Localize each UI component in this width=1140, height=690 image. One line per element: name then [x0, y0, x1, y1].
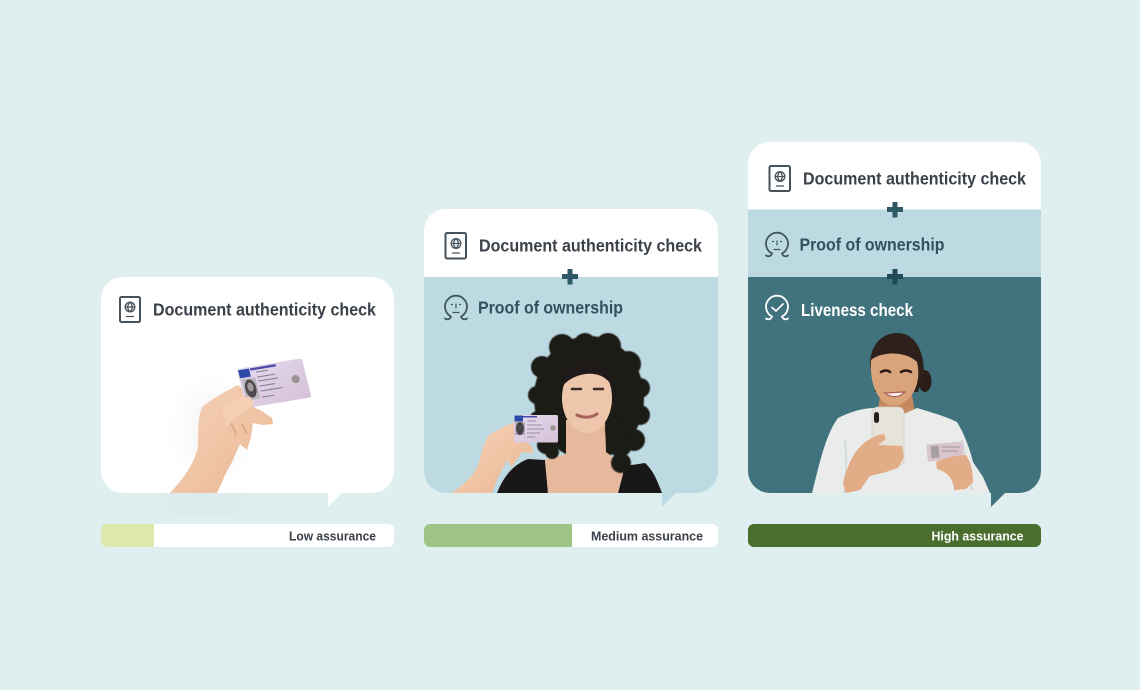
top	[497, 459, 662, 493]
icon: plus	[562, 269, 578, 284]
bar: low assurance	[101, 524, 394, 547]
heading: document authenticity check: Document authenticity check	[479, 236, 702, 256]
panel background: blue lower section with tail	[424, 277, 718, 507]
photo: hand holding ID card	[170, 358, 311, 493]
right hand	[936, 455, 973, 490]
icon: face	[445, 296, 467, 319]
hair	[528, 333, 650, 460]
neck	[878, 395, 914, 414]
label: Medium assurance	[591, 528, 703, 544]
icon: plus	[887, 269, 903, 284]
label: Low assurance	[289, 528, 376, 544]
hand	[452, 423, 533, 493]
ID card	[514, 415, 558, 442]
photo: woman photographing ID with phone	[812, 333, 990, 493]
panel: high assurance	[748, 142, 1041, 547]
panel background: teal lower section with tail	[748, 277, 1041, 507]
ID card	[237, 358, 311, 408]
ID card	[926, 441, 964, 462]
panel: medium assurance	[424, 209, 718, 547]
hair bun	[918, 370, 932, 392]
icon: face with check	[766, 296, 788, 319]
icon: plus	[887, 202, 903, 218]
phone	[872, 407, 904, 466]
heading: proof of ownership: Proof of ownership	[478, 298, 623, 318]
neck and chest	[545, 420, 625, 493]
panel background: white top section	[748, 142, 1041, 210]
left hand	[843, 434, 904, 493]
hair	[870, 333, 924, 392]
icon: passport	[120, 297, 140, 322]
label: High assurance	[932, 528, 1024, 544]
bar: high assurance	[748, 524, 1041, 547]
infographic: identity assurance levels	[101, 142, 1041, 547]
panel background: light blue middle section	[748, 210, 1041, 277]
heading: liveness check: Liveness check	[801, 300, 913, 320]
heading: proof of ownership: Proof of ownership	[800, 234, 944, 254]
heading: document authenticity check: Document authenticity check	[153, 300, 376, 320]
sweater	[812, 408, 990, 493]
face	[871, 354, 918, 406]
panel background: white top section	[424, 209, 718, 277]
thumb	[222, 397, 254, 428]
eyes and mouth	[572, 388, 603, 390]
photo: woman with curly hair holding ID card	[452, 333, 662, 493]
panel: low assurance	[101, 277, 394, 547]
bar: medium assurance	[424, 524, 718, 547]
heading: document authenticity check: Document authenticity check	[803, 168, 1026, 188]
eyes and smile	[881, 370, 911, 372]
icon: passport	[446, 233, 466, 258]
hair: front locks	[545, 421, 632, 473]
panel background: white speech bubble	[101, 277, 394, 507]
icon: passport	[770, 166, 790, 191]
face	[562, 374, 612, 433]
icon: face	[766, 233, 788, 256]
